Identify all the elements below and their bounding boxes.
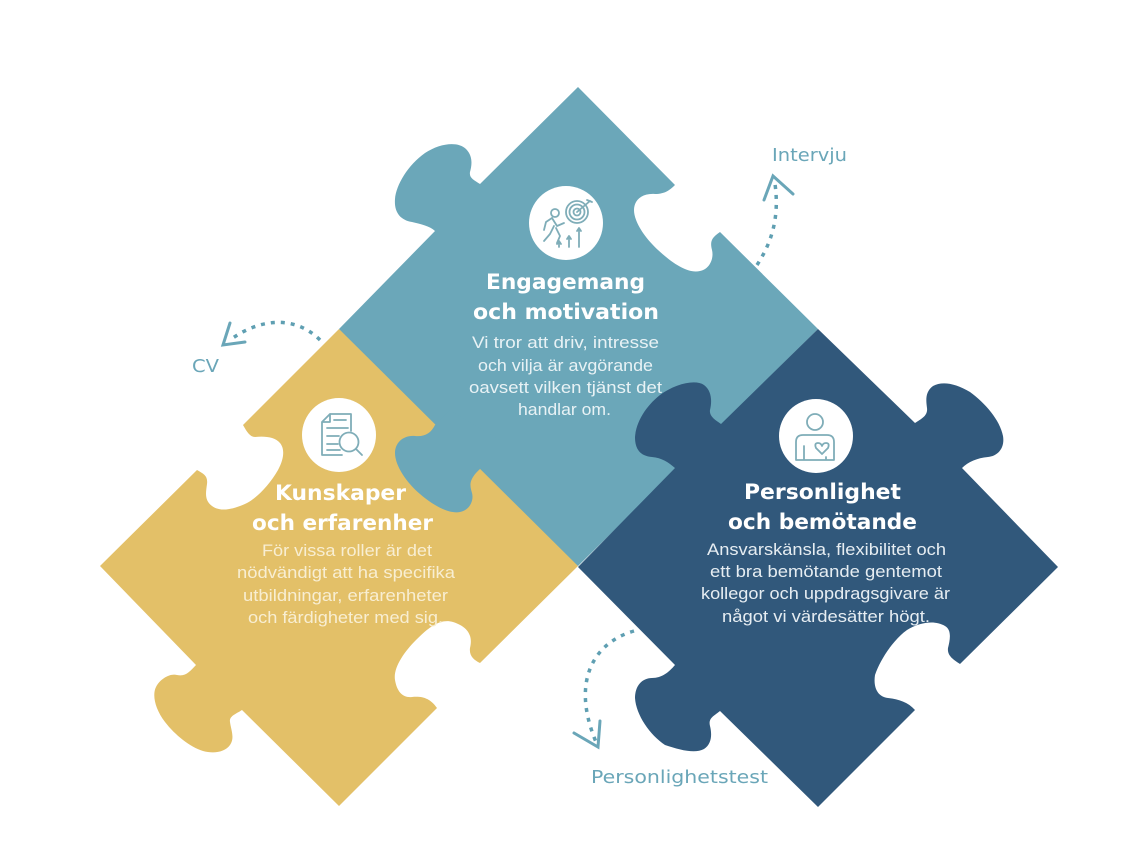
- body text: yellow piece: utbildningar, erfarenheter: [243, 587, 449, 605]
- body text: dark piece: kollegor och uppdragsgivare är: [701, 585, 951, 603]
- arrow: Intervju: [757, 176, 793, 265]
- panel: Kunskaper och erfarenheter: [100, 329, 578, 806]
- icon: runner and target: [529, 186, 603, 260]
- heading: och erfarenher: och erfarenher: [252, 511, 434, 535]
- heading: och bemötande: och bemötande: [728, 510, 917, 534]
- panel: Personlighet och bemötande: [578, 329, 1058, 807]
- heading: och motivation: och motivation: [473, 300, 659, 324]
- body text: teal piece: och vilja är avgörande: [478, 357, 653, 375]
- label: Personlighetstest: Personlighetstest: [591, 767, 768, 788]
- body text: dark piece: ett bra bemötande gentemot: [710, 563, 942, 581]
- body text: teal piece: handlar om.: [518, 401, 611, 419]
- panel: Engagemang och motivation: [339, 87, 818, 566]
- heading: Engagemang: Engagemang: [486, 270, 645, 294]
- label: CV: CV: [192, 356, 220, 377]
- body text: yellow piece: [237, 542, 456, 627]
- body text: dark piece: något vi värdesätter högt.: [722, 608, 930, 626]
- teal puzzle piece: [339, 87, 818, 566]
- body text: yellow piece: nödvändigt att ha specifika: [237, 564, 456, 582]
- heading: Personlighet: Personlighet: [744, 480, 901, 504]
- arrow: CV: [223, 322, 320, 345]
- yellow puzzle piece: [100, 329, 578, 806]
- body text: yellow piece: och färdigheter med sig.: [248, 609, 443, 627]
- icon: document with magnifier: [302, 398, 376, 472]
- body text: dark piece: [701, 541, 951, 626]
- body text: teal piece: Vi tror att driv, intresse: [472, 334, 659, 352]
- body text: yellow piece: För vissa roller är det: [262, 542, 432, 560]
- arrow: Personlighetstest: [574, 631, 634, 747]
- heading: Kunskaper: Kunskaper: [275, 481, 407, 505]
- teal tab over yellow piece: [395, 410, 500, 512]
- body text: teal piece: oavsett vilken tjänst det: [469, 379, 662, 397]
- body text: teal piece: [469, 334, 662, 419]
- icon: person with heart: [779, 399, 853, 473]
- dark blue puzzle piece: [578, 329, 1058, 807]
- body text: dark piece: Ansvarskänsla, flexibilitet och: [707, 541, 946, 559]
- label: Intervju: Intervju: [772, 145, 847, 166]
